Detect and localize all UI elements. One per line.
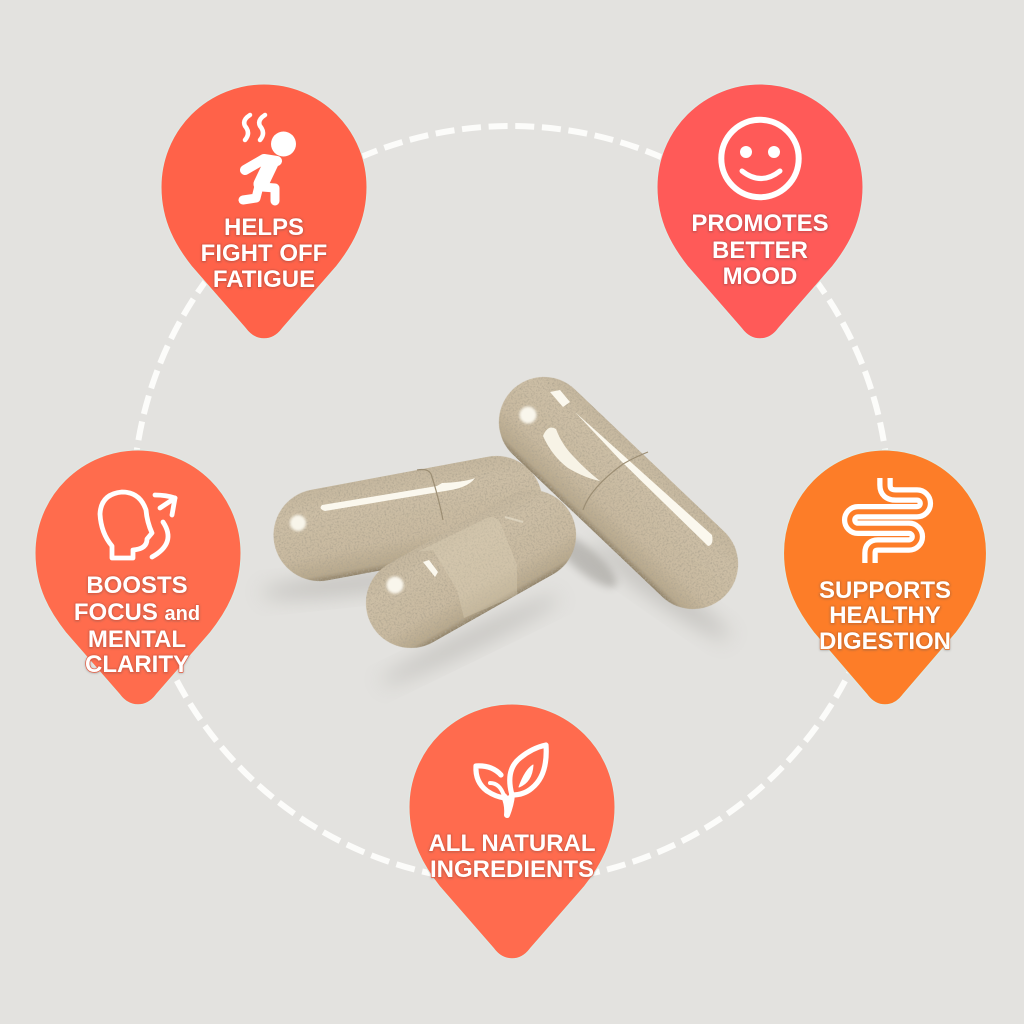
label: FIGHT OFF bbox=[201, 240, 327, 267]
right capsule bbox=[480, 358, 757, 628]
label: BETTER bbox=[712, 237, 808, 264]
label: HELPS bbox=[224, 214, 304, 241]
capsule group photo bbox=[260, 358, 757, 691]
capsule shadows bbox=[260, 525, 735, 691]
left capsule bbox=[266, 448, 550, 589]
label: INGREDIENTS bbox=[430, 856, 594, 883]
icon: smiling face bbox=[721, 120, 799, 197]
panel: supports healthy digestion bbox=[784, 450, 986, 705]
label: CLARITY bbox=[85, 651, 189, 678]
icon: running figure with steam bbox=[243, 115, 296, 201]
panel: boosts focus and mental clarity bbox=[35, 450, 241, 705]
pin shape bbox=[657, 84, 863, 339]
label: HEALTHY bbox=[829, 602, 941, 629]
pin shape bbox=[784, 450, 986, 705]
label: SUPPORTS bbox=[819, 577, 951, 604]
panel: promotes better mood bbox=[657, 84, 863, 339]
label: PROMOTES bbox=[691, 210, 829, 237]
label: FOCUS and bbox=[74, 599, 200, 626]
pin shape bbox=[409, 704, 615, 959]
label: MOOD bbox=[723, 263, 797, 290]
dashed ring connecting benefits bbox=[133, 126, 889, 882]
label: ALL NATURAL bbox=[428, 830, 596, 857]
panel: helps fight off fatigue bbox=[161, 84, 367, 339]
panel: all natural ingredients bbox=[409, 704, 615, 959]
icon: intestines bbox=[850, 476, 925, 565]
label: DIGESTION bbox=[819, 628, 951, 655]
icon: leaf sprout bbox=[476, 745, 546, 815]
label: FATIGUE bbox=[213, 266, 315, 293]
pin shape bbox=[35, 450, 241, 705]
pin shape bbox=[161, 84, 367, 339]
icon: head with arrows bbox=[100, 492, 175, 558]
label: BOOSTS bbox=[86, 572, 188, 599]
label: MENTAL bbox=[88, 626, 186, 653]
front capsule bbox=[350, 474, 592, 664]
